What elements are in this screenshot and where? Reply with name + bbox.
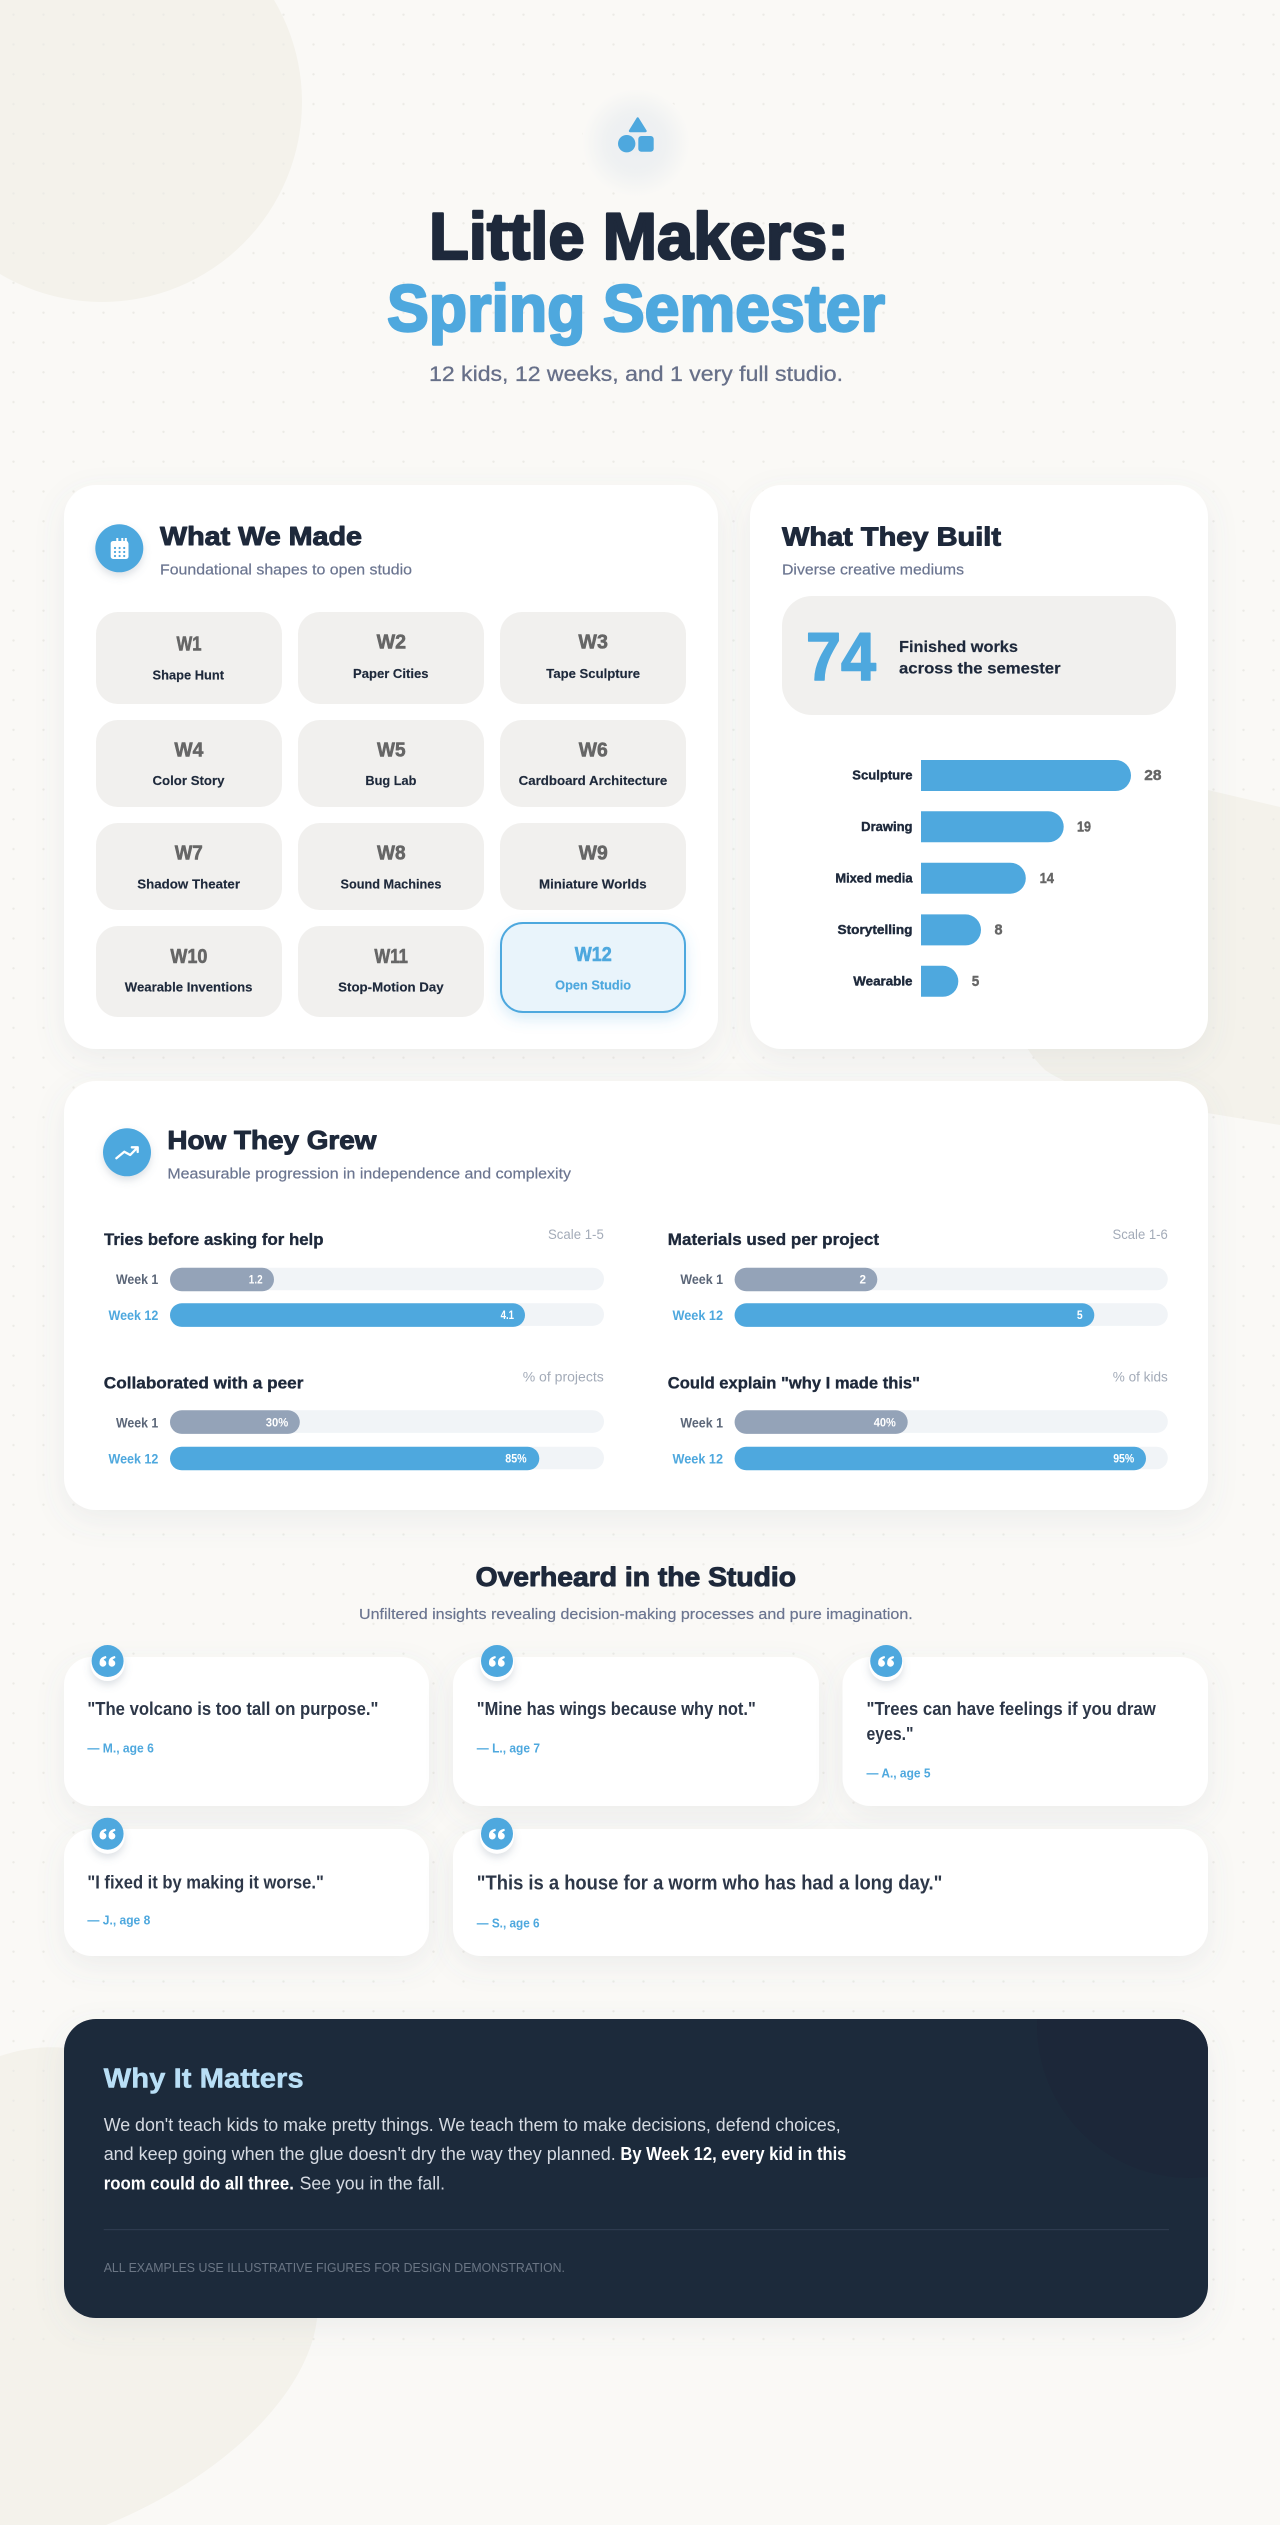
subheading: Measurable progression in independence and complexity [167, 1165, 572, 1182]
quote card: trees [842, 1645, 1208, 1806]
metric: could explain why I made this: Could explain "why I made this" [668, 1373, 920, 1392]
tile W1 [96, 612, 282, 704]
tile W12 highlighted: Open Studio [555, 978, 631, 992]
tile W2: Paper Cities [353, 667, 429, 681]
body text: By Week 12, every kid in this [620, 2144, 846, 2164]
bar: sculpture: Sculpture [852, 768, 913, 782]
tile W5: W5 [377, 739, 406, 761]
title line 1: Little Makers: [429, 199, 849, 273]
metric: could explain why I made this: 40% [874, 1416, 896, 1430]
subheading: Foundational shapes to open studio [160, 562, 412, 578]
quote text: "Trees can have feelings if you draw [866, 1699, 1157, 1719]
tile W10: Wearable Inventions [125, 981, 253, 995]
quote card: volcano [64, 1645, 429, 1806]
tile W11: Stop-Motion Day [338, 981, 444, 995]
bar: storytelling: Storytelling [838, 923, 912, 937]
tile W10: W10 [170, 946, 207, 968]
tile W4: W4 [174, 739, 204, 761]
tile W3: W3 [578, 631, 608, 653]
tile W6: W6 [579, 739, 608, 761]
icon: calendar [95, 524, 143, 572]
tile W7 [96, 823, 282, 910]
tile W8 [298, 823, 484, 910]
quote text: "I fixed it by making it worse." [87, 1872, 324, 1892]
tile W1: W1 [176, 634, 202, 656]
tile W11 [298, 926, 484, 1017]
metric: materials used per project: 5 [1077, 1308, 1083, 1322]
tile W7: Shadow Theater [137, 877, 240, 891]
icon: quote badge [91, 1818, 125, 1854]
panel: what we made [64, 485, 718, 1049]
metric: collaborated with a peer: 30% [266, 1416, 289, 1430]
heading: What They Built [782, 522, 1001, 552]
attribution: — M., age 6 [87, 1740, 154, 1755]
bar: storytelling [838, 914, 1002, 945]
subtitle: 12 kids, 12 weeks, and 1 very full studio. [429, 363, 843, 386]
quote text [866, 1699, 1157, 1744]
quote text: eyes." [866, 1724, 914, 1744]
attribution: — L., age 7 [477, 1740, 540, 1755]
tile W2 [298, 612, 484, 704]
bar: wearable: Wearable [853, 975, 913, 989]
attribution: — J., age 8 [87, 1912, 150, 1927]
header [387, 89, 885, 386]
tile W4: Color Story [152, 774, 225, 788]
tile W6: Cardboard Architecture [519, 774, 667, 788]
quote card: worm house [453, 1818, 1208, 1956]
tile W5: Bug Lab [365, 774, 417, 788]
quote text: "Mine has wings because why not." [477, 1699, 756, 1719]
tile W10 [96, 926, 282, 1017]
metric: tries before asking for help [104, 1226, 604, 1327]
metric: tries before asking for help: Scale 1-5 [548, 1226, 604, 1242]
icon: quote badge [869, 1645, 903, 1681]
icon: trend arrow [103, 1128, 151, 1176]
metric: collaborated with a peer: Week 1 [116, 1414, 158, 1430]
tile W2: W2 [377, 631, 406, 653]
heading: What We Made [160, 521, 362, 551]
tile W4 [96, 720, 282, 807]
bar: storytelling: 8 [994, 922, 1002, 939]
metric: collaborated with a peer [104, 1369, 604, 1470]
body text: room could do all three. [104, 2174, 294, 2194]
bar: wearable: 5 [972, 973, 979, 990]
stat box: 74 finished works: 74 [806, 619, 876, 695]
metric: materials used per project: Week 1 [680, 1271, 723, 1287]
quote text: "This is a house for a worm who has had a long day." [477, 1872, 942, 1894]
logo icon: triangle, circle and square [582, 89, 690, 197]
tile W8: Sound Machines [340, 877, 441, 891]
body text: We don't teach kids to make pretty things. We teach them to make decisions, defend choices, [104, 2115, 841, 2135]
title line 2: Spring Semester [387, 271, 885, 345]
tile W5 [298, 720, 484, 807]
metric: tries before asking for help: 4.1 [501, 1308, 514, 1322]
tile W3: Tape Sculpture [546, 667, 640, 681]
bar: mixed media: 14 [1040, 870, 1055, 887]
metric: could explain why I made this: Week 1 [680, 1414, 723, 1430]
metric: collaborated with a peer: Collaborated with a peer [104, 1373, 304, 1392]
metric: could explain why I made this: % of kids [1113, 1369, 1168, 1385]
metric: collaborated with a peer: Week 12 [108, 1450, 158, 1466]
bar: sculpture: 28 [1144, 767, 1162, 784]
bar chart: mediums [835, 760, 1162, 997]
tile W12 highlighted [501, 923, 685, 1012]
quote text: "The volcano is too tall on purpose." [87, 1699, 378, 1719]
heading: Why It Matters [104, 2063, 304, 2094]
heading: How They Grew [167, 1125, 377, 1155]
section subheading: Unfiltered insights revealing decision-making processes and pure imagination. [359, 1606, 913, 1623]
tile W9 [500, 823, 686, 910]
subheading: Diverse creative mediums [782, 562, 964, 578]
bar: drawing: Drawing [861, 820, 912, 834]
tile W9: W9 [579, 843, 608, 865]
blob: bottom left [0, 2047, 317, 2525]
stat box: 74 finished works: Finished works [899, 639, 1018, 656]
panel: how they grew [64, 1081, 1208, 1510]
metric: tries before asking for help: Week 1 [116, 1271, 158, 1287]
icon: quote badge [480, 1818, 514, 1854]
quote card: wings [453, 1645, 819, 1806]
tile W9: Miniature Worlds [539, 877, 647, 891]
attribution: — A., age 5 [866, 1765, 930, 1780]
tile W11: W11 [374, 946, 408, 968]
bar: mixed media [835, 863, 1055, 894]
metric: tries before asking for help: Tries before asking for help [104, 1230, 324, 1249]
body text [104, 2115, 846, 2194]
bar: wearable [853, 966, 979, 997]
metric: materials used per project [668, 1226, 1168, 1327]
tile W1: Shape Hunt [152, 669, 225, 683]
metric: could explain why I made this: Week 12 [672, 1450, 723, 1466]
attribution: — S., age 6 [477, 1915, 540, 1930]
tile W3 [500, 612, 686, 704]
icon: quote badge [480, 1645, 514, 1681]
metric: tries before asking for help: 1.2 [249, 1272, 263, 1286]
metric: collaborated with a peer: 85% [505, 1452, 527, 1466]
metric: materials used per project: Materials used per project [668, 1230, 879, 1249]
tile W7: W7 [175, 843, 203, 865]
metric: could explain why I made this [668, 1369, 1168, 1470]
panel: what they built [750, 485, 1208, 1049]
section heading: overheard in the studio: Overheard in the Studio [476, 1562, 796, 1592]
body text: See you in the fall. [300, 2174, 445, 2194]
bar: drawing [861, 811, 1091, 842]
icon: quote badge [91, 1645, 125, 1681]
metric: could explain why I made this: 95% [1113, 1452, 1134, 1466]
metric: materials used per project: Week 12 [672, 1307, 723, 1323]
bar: drawing: 19 [1077, 818, 1091, 836]
footnote: ALL EXAMPLES USE ILLUSTRATIVE FIGURES FOR DESIGN DEMONSTRATION. [104, 2260, 565, 2275]
metric: materials used per project: 2 [860, 1272, 866, 1286]
stat box: 74 finished works [782, 596, 1176, 715]
metric: collaborated with a peer: % of projects [523, 1369, 604, 1385]
body text: and keep going when the glue doesn't dry the way they planned. [104, 2144, 616, 2164]
blob: top left [0, 0, 302, 302]
stat box: 74 finished works: across the semester [899, 661, 1061, 678]
tile W12 highlighted: W12 [575, 944, 612, 966]
metric: materials used per project: Scale 1-6 [1112, 1226, 1168, 1242]
panel: why it matters [64, 2019, 1208, 2323]
tile W6 [500, 720, 686, 807]
tile W8: W8 [377, 843, 406, 865]
quote card: fixed it [64, 1818, 429, 1956]
blob: right middle [1005, 787, 1280, 1125]
metric: tries before asking for help: Week 12 [108, 1307, 158, 1323]
bar: mixed media: Mixed media [835, 872, 914, 886]
bar: sculpture [852, 760, 1162, 791]
